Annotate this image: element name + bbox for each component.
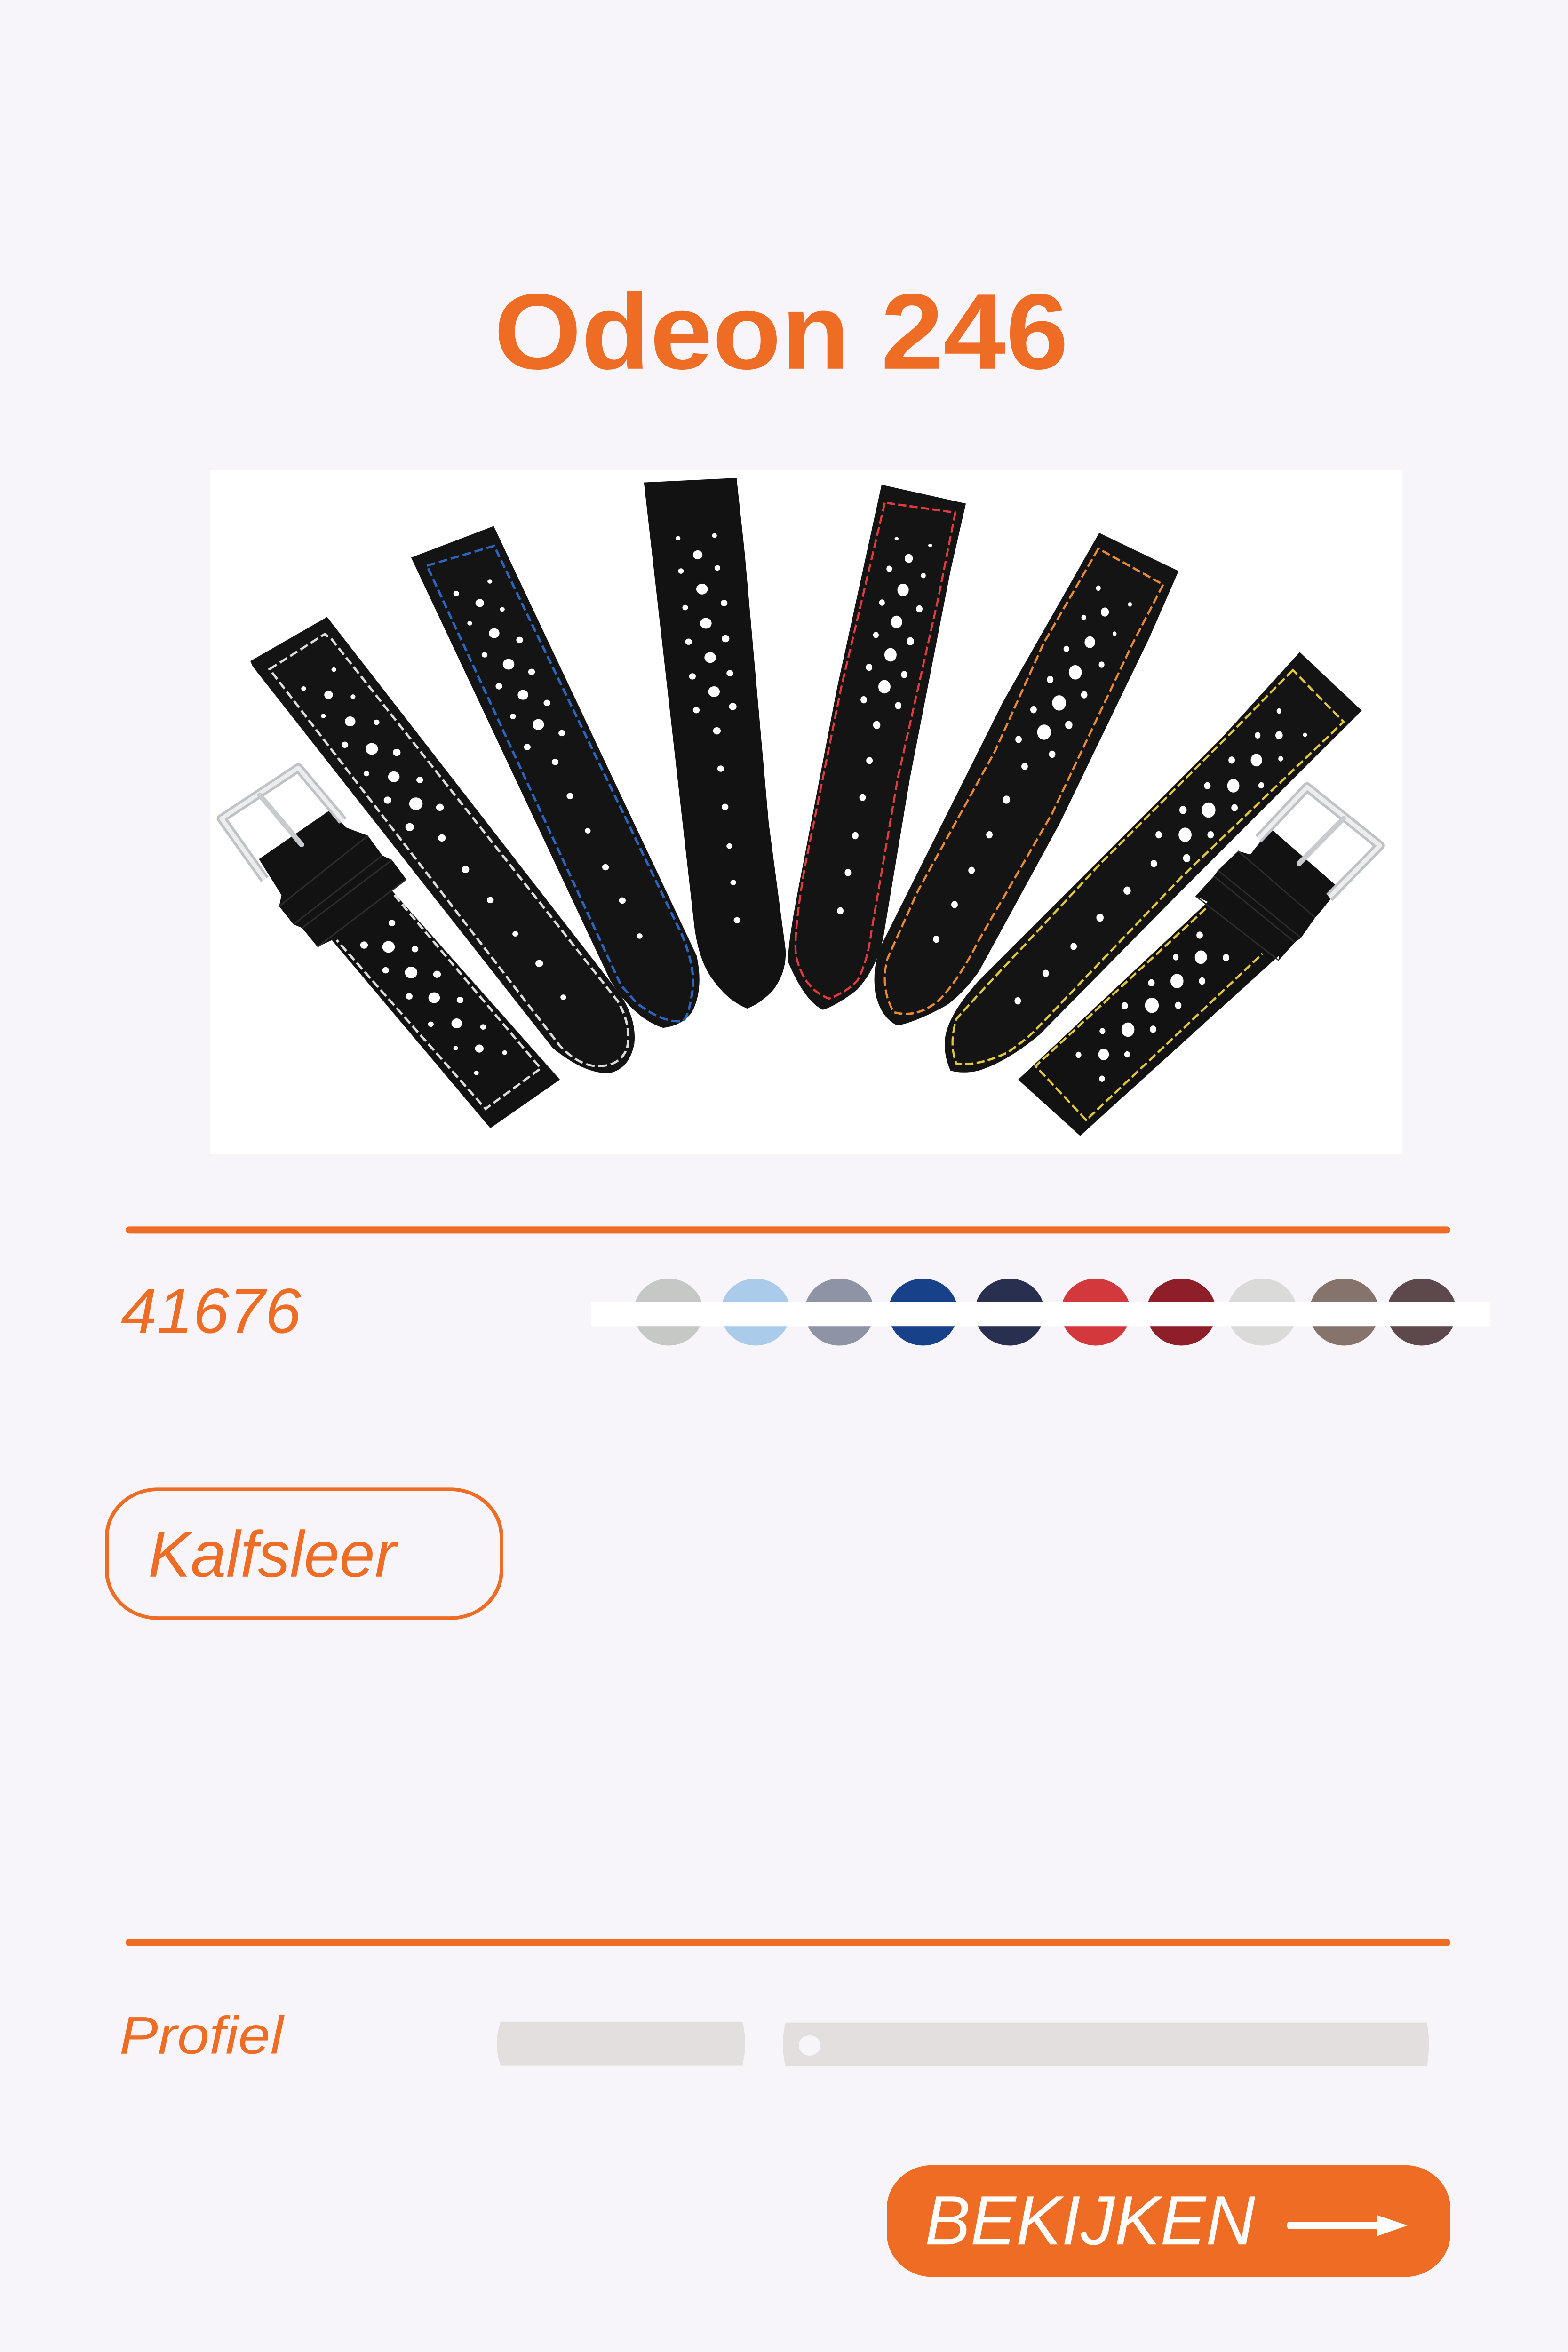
icon: arrow <box>1287 2215 1408 2236</box>
strap: white stitching buckle piece <box>222 768 560 1128</box>
product photo: seven watch straps <box>210 470 1402 1154</box>
strap: white stitching long piece <box>250 617 635 1073</box>
button <box>887 2165 1450 2277</box>
button: BEKIJKEN <box>925 2182 1255 2259</box>
strap: yellow stitching <box>945 652 1362 1073</box>
profile label: Profiel <box>119 2006 285 2065</box>
strap: black stitching, centre <box>644 478 786 1009</box>
strap: red stitching <box>788 485 966 1010</box>
title: Odeon 246 <box>494 272 1068 392</box>
strap: blue stitching <box>411 526 700 1028</box>
strap: yellow stitching buckle piece <box>1018 787 1380 1136</box>
material tag <box>107 1489 501 1618</box>
profile shape: short strap piece <box>497 2022 745 2066</box>
material tag: Kalfsleer <box>148 1518 398 1591</box>
strap group: left straps <box>222 478 786 1128</box>
profile shape: long strap piece <box>783 2023 1429 2066</box>
strap group: right straps <box>788 485 1380 1136</box>
colour swatches <box>591 1279 1490 1345</box>
article number: 41676 <box>121 1275 301 1346</box>
strap: orange stitching <box>875 533 1178 1025</box>
